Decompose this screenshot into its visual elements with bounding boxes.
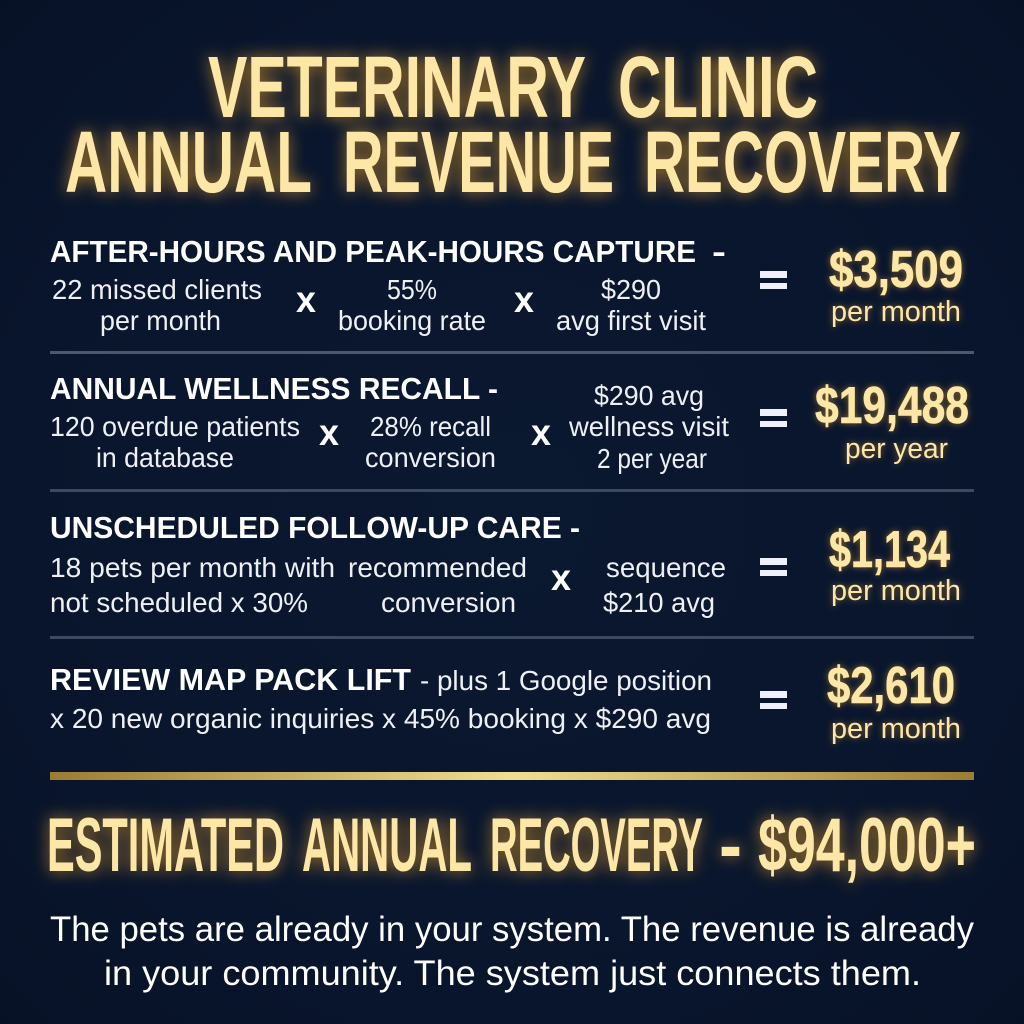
formula: after-hours capture: 55%	[387, 274, 437, 305]
heading: unscheduled follow-up care: UNSCHEDULED FOLLOW-UP CARE -	[50, 510, 580, 545]
formula: unscheduled follow-up care: x	[551, 557, 571, 598]
panel: after-hours capture	[50, 234, 963, 336]
equals sign	[760, 691, 787, 709]
panel: review map pack lift	[50, 657, 961, 745]
formula: unscheduled follow-up care: $210 avg	[603, 587, 715, 618]
formula: review map pack lift	[50, 665, 712, 734]
result: $19,488 per year: $19,488	[815, 377, 969, 435]
equals sign	[760, 409, 787, 427]
formula: after-hours capture: 22 missed clients	[52, 274, 262, 305]
formula: after-hours capture: per month	[100, 305, 221, 336]
formula: annual wellness recall: $290 avg	[594, 380, 704, 411]
panel: annual wellness recall	[50, 371, 969, 474]
heading: after-hours capture: -	[712, 234, 726, 269]
title: ANNUAL	[65, 114, 312, 211]
formula: after-hours capture	[52, 274, 706, 336]
formula: after-hours capture: x	[514, 279, 534, 320]
formula: annual wellness recall: x	[319, 412, 339, 453]
formula: unscheduled follow-up care: conversion	[381, 587, 516, 618]
result: $1,134 per month	[829, 521, 961, 607]
title	[65, 39, 961, 211]
formula: unscheduled follow-up care: recommended	[348, 552, 527, 583]
closing statement: in your community. The system just connects them.	[104, 954, 921, 993]
gold divider	[50, 772, 974, 780]
result: $3,509 per month: $3,509	[829, 241, 963, 299]
formula: after-hours capture: x	[296, 279, 316, 320]
panel: unscheduled follow-up care	[50, 510, 961, 618]
formula: review map pack lift: - plus 1 Google position	[420, 665, 712, 696]
formula: unscheduled follow-up care	[50, 552, 726, 618]
formula: unscheduled follow-up care: sequence	[606, 552, 726, 583]
formula: annual wellness recall: x	[531, 412, 551, 453]
result: $1,134 per month: $1,134	[829, 521, 950, 579]
formula: annual wellness recall: 28% recall	[370, 411, 491, 442]
total: estimated annual recovery: ANNUAL	[302, 803, 472, 888]
total: estimated annual recovery	[47, 803, 976, 888]
equals sign	[760, 271, 787, 289]
result: $2,610 per month	[827, 657, 961, 745]
formula: review map pack lift: x 20 new organic inquiries x 45% booking x $290 avg	[50, 703, 711, 734]
result: $3,509 per month	[829, 241, 963, 328]
formula: after-hours capture: avg first visit	[556, 305, 706, 336]
result: $2,610 per month: $2,610	[827, 657, 955, 715]
equals sign	[760, 558, 787, 576]
formula: after-hours capture: booking rate	[338, 305, 486, 336]
total: estimated annual recovery: -	[719, 803, 742, 888]
closing statement	[50, 910, 974, 993]
formula: annual wellness recall: conversion	[365, 442, 496, 473]
title: VETERINARY	[208, 39, 586, 136]
heading: after-hours capture: AFTER-HOURS AND PEAK-HOURS CAPTURE	[50, 234, 696, 269]
title: CLINIC	[618, 39, 818, 136]
heading: annual wellness recall: ANNUAL WELLNESS RECALL -	[50, 371, 498, 406]
formula: after-hours capture: $290	[601, 274, 661, 305]
formula: unscheduled follow-up care: not scheduled x 30%	[50, 587, 308, 618]
formula: annual wellness recall: wellness visit	[568, 411, 729, 442]
formula: annual wellness recall: 120 overdue patients	[50, 411, 300, 442]
formula: annual wellness recall	[50, 380, 729, 474]
closing statement: The pets are already in your system. The revenue is already	[50, 910, 974, 949]
formula: unscheduled follow-up care: 18 pets per month with	[50, 552, 335, 583]
heading: review map pack lift: REVIEW MAP PACK LIFT	[50, 662, 411, 697]
result: $19,488 per year	[815, 377, 969, 465]
total: estimated annual recovery: RECOVERY	[490, 803, 703, 888]
result: $1,134 per month: per month	[831, 575, 961, 607]
formula: annual wellness recall: 2 per year	[597, 443, 707, 474]
formula: annual wellness recall: in database	[96, 442, 234, 473]
result: $19,488 per year: per year	[845, 433, 948, 465]
title: REVENUE	[343, 114, 614, 211]
result: $3,509 per month: per month	[831, 296, 961, 328]
result: $2,610 per month: per month	[831, 713, 961, 745]
total: estimated annual recovery: ESTIMATED	[47, 803, 284, 888]
